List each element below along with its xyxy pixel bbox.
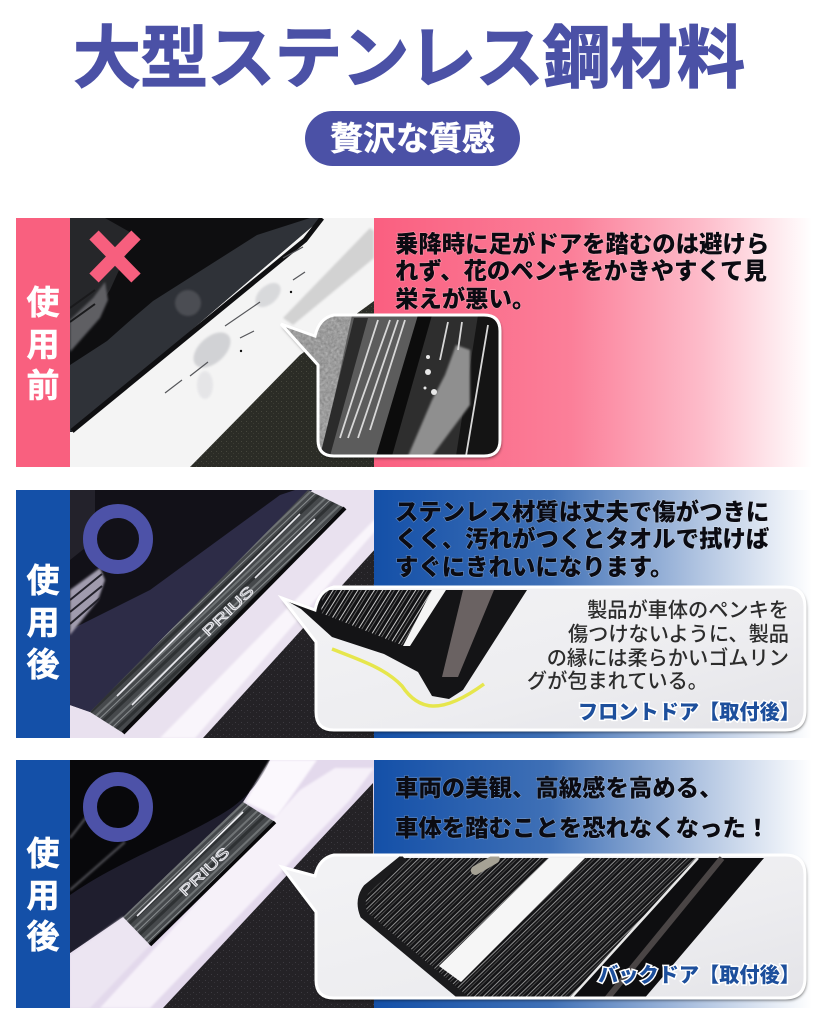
side label: after — [16, 760, 70, 1008]
side label: after: 後 — [26, 918, 60, 955]
callout: back door close-up — [282, 853, 805, 1000]
text: stainless description: ステンレス材質は丈夫で傷がつきに — [395, 498, 769, 525]
photo: back door sill plate — [70, 760, 374, 1008]
callout: front door close-up with rubber edge: 製品が車体のペンキを — [587, 599, 789, 622]
text background — [374, 760, 819, 1008]
callout: front door close-up with rubber edge: グが包まれている。 — [527, 670, 708, 693]
title: 大型ステンレス鋼材料 — [73, 21, 745, 97]
panel: after use, back door — [16, 760, 819, 1008]
text: premium look description: 車体を踏むことを恐れなくなった！ — [395, 815, 769, 841]
text: stainless description: すぐにきれいになります。 — [395, 554, 673, 580]
side label: after: 使 — [26, 835, 60, 872]
callout: front door close-up with rubber edge — [275, 587, 805, 730]
side label: after — [16, 490, 70, 738]
photo: front door sill plate — [70, 490, 376, 738]
text: stainless description — [395, 498, 770, 580]
callout: front door close-up with rubber edge: 傷つけないように、製品 — [568, 623, 789, 646]
subtitle pill: 贅沢な質感 — [330, 120, 495, 157]
side label: after: 使 — [26, 562, 60, 599]
text: premium look description — [395, 774, 769, 841]
side label: after: 用 — [26, 877, 60, 914]
icon: circle mark — [90, 511, 146, 567]
callout: back door close-up: バックドア【取付後】 — [598, 963, 800, 987]
callout: close-up of scratches — [275, 310, 505, 460]
text: before use description: 栄えが悪い。 — [395, 285, 535, 312]
panel: after use, front door — [16, 490, 819, 738]
text: premium look description: 車両の美観、高級感を高める、 — [395, 774, 722, 801]
panel: before use — [16, 218, 819, 467]
side label: before: 使 — [26, 284, 60, 321]
photo: stained door sill — [70, 218, 374, 467]
text: stainless description: くく、汚れがつくとタオルで拭けば — [395, 525, 770, 552]
subtitle pill — [305, 111, 520, 166]
text: before use description: 乗降時に足がドアを踏むのは避けら — [395, 230, 769, 257]
side label: before: 用 — [26, 326, 60, 363]
plate logo: PRIUS — [199, 582, 257, 639]
text: before use description — [395, 230, 769, 312]
side label: after: 後 — [26, 646, 60, 683]
icon: cross mark — [94, 235, 136, 278]
side label: after: 用 — [26, 604, 60, 641]
side label: before — [16, 218, 70, 467]
callout: front door close-up with rubber edge: の縁には柔らかいゴムリン — [547, 646, 789, 670]
text: before use description: れず、花のペンキをかきやすくて見 — [395, 257, 767, 284]
side label: before: 前 — [26, 367, 60, 404]
text background — [374, 218, 819, 467]
text background — [374, 490, 819, 738]
plate logo: PRIUS — [176, 844, 232, 899]
icon: circle mark — [90, 779, 146, 835]
callout: front door close-up with rubber edge: フロントドア【取付後】 — [578, 700, 800, 724]
